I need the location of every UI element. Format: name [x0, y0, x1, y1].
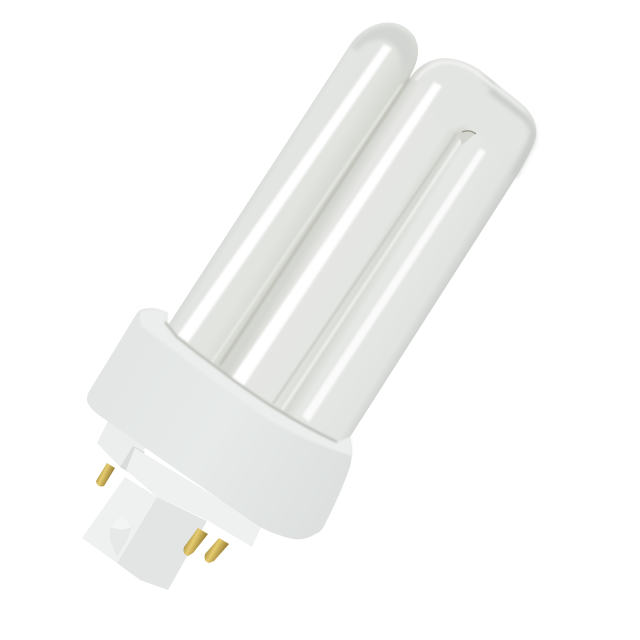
gap shading between limbs [220, 78, 410, 365]
right highlight [302, 148, 486, 422]
pin: front middle [184, 528, 208, 556]
back tube end shading [352, 26, 414, 78]
plug lower face [117, 497, 207, 590]
outer shading at cap corner [490, 90, 533, 176]
side key [97, 421, 150, 467]
top rim glow [416, 62, 530, 134]
pin: rear left [96, 463, 115, 486]
back tube highlight [177, 44, 392, 343]
plug flange [126, 448, 262, 547]
back tube [165, 23, 418, 400]
glass seam [273, 133, 457, 404]
front tube body [200, 58, 536, 460]
plug base [82, 421, 262, 590]
front U tube [200, 58, 536, 460]
plug upper face [82, 477, 157, 563]
top cap shading [420, 66, 526, 156]
collar ring [87, 308, 352, 539]
pin: front right [204, 538, 229, 563]
collar top lip [140, 309, 352, 456]
exhaust tip [458, 130, 476, 145]
left highlight [231, 82, 442, 387]
collar lip shadow [165, 322, 337, 442]
key emboss [110, 515, 132, 557]
